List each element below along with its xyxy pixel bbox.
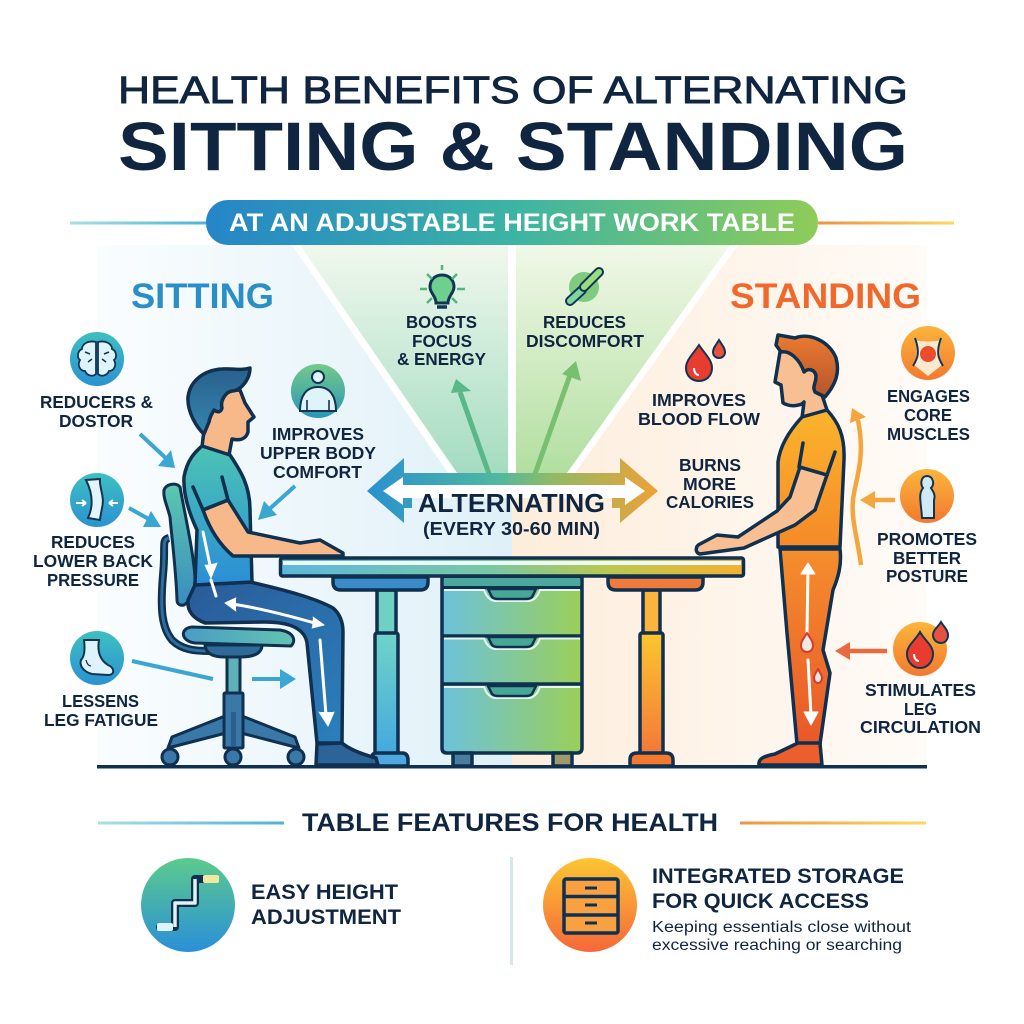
label: stimulates leg circulation: STIMULATES — [865, 680, 976, 700]
label: burns more calories: CALORIES — [666, 492, 754, 512]
label: integrated storage: Keeping essentials close without — [652, 919, 912, 936]
panel: center left green wedge — [300, 245, 508, 473]
label: engages core muscles: CORE — [904, 405, 952, 425]
label: alternating: (EVERY 30-60 MIN) — [423, 518, 600, 539]
standing person — [696, 335, 844, 765]
label: boosts focus and energy: & ENERGY — [397, 349, 486, 369]
label: lessens leg fatigue: LESSENS — [62, 691, 139, 711]
hair — [188, 368, 250, 434]
shoe — [316, 743, 378, 765]
icon: blood drops — [686, 340, 725, 381]
icon: height adjust crank — [141, 858, 235, 952]
subtitle banner: AT AN ADJUSTABLE HEIGHT WORK TABLE — [229, 209, 795, 237]
label: engages core muscles: ENGAGES — [887, 386, 970, 406]
face — [775, 345, 835, 418]
bracket right — [608, 577, 703, 590]
icon: brain — [70, 332, 124, 386]
table leg left — [372, 590, 408, 766]
floor line — [97, 765, 927, 768]
label: boosts focus and energy — [397, 312, 486, 369]
label: lessens leg fatigue — [44, 691, 158, 730]
title: HEALTH BENEFITS OF ALTERNATING — [118, 70, 908, 112]
arm — [203, 500, 343, 556]
table leg right — [630, 590, 673, 766]
label: integrated storage: excessive reaching or searching — [652, 937, 902, 954]
title — [118, 70, 908, 185]
label: promotes better posture: BETTER — [893, 548, 961, 568]
divider — [510, 857, 513, 965]
label: improves blood flow: BLOOD FLOW — [638, 409, 760, 429]
sitting chair — [162, 484, 304, 765]
icon: lower back — [70, 473, 124, 527]
label: improves blood flow — [638, 390, 760, 429]
sleeve lines — [193, 477, 228, 510]
label: burns more calories: MORE — [683, 474, 736, 494]
label: improves upper body comfort: COMFORT — [273, 462, 362, 482]
icon: core muscles — [901, 326, 955, 380]
label: reduces discomfort: REDUCES — [543, 312, 626, 332]
neck and face — [202, 390, 254, 455]
blood drops on leg — [801, 633, 822, 683]
label: lessens leg fatigue: LEG FATIGUE — [44, 710, 158, 730]
label: reduces lower back pressure — [33, 532, 153, 590]
arrow: to upper back — [140, 434, 175, 468]
label: engages core muscles: MUSCLES — [887, 424, 970, 444]
label: reduces lower back pressure: LOWER BACK — [33, 551, 153, 571]
label: boosts focus and energy: BOOSTS — [406, 312, 477, 332]
arrow: to leg — [835, 642, 887, 660]
label: reduces discomfort — [526, 312, 644, 351]
panel: center right green wedge — [516, 245, 730, 473]
sleeve lines — [799, 443, 835, 475]
label: integrated storage: FOR QUICK ACCESS — [652, 890, 869, 913]
subtitle banner — [70, 200, 954, 245]
arrow: to upper body — [258, 486, 295, 520]
label: engages core muscles — [887, 386, 970, 444]
background panels — [97, 245, 927, 766]
heading: standing: STANDING — [730, 277, 921, 316]
shirt — [184, 446, 252, 585]
icon: double arrow alternating — [367, 458, 658, 523]
label: improves upper body comfort — [260, 424, 376, 482]
label: reduces lower back pressure: REDUCES — [51, 532, 135, 552]
icon: connected link — [569, 272, 599, 302]
label: reducers and dostor: DOSTOR — [59, 411, 133, 431]
sitting person — [184, 368, 378, 765]
icon: foot — [70, 631, 124, 685]
label: reducers and dostor: REDUCERS & — [40, 392, 153, 412]
title: SITTING & STANDING — [118, 108, 908, 185]
table top — [280, 558, 744, 576]
icon: storage cabinet — [543, 858, 637, 952]
label: improves upper body comfort: UPPER BODY — [260, 443, 376, 463]
label: integrated storage — [652, 865, 912, 954]
label: reduces discomfort: DISCOMFORT — [526, 331, 644, 351]
label: integrated storage: INTEGRATED STORAGE — [652, 865, 904, 888]
label: alternating: ALTERNATING — [418, 488, 605, 518]
label: easy height adjustment — [251, 881, 401, 929]
bracket left — [333, 577, 428, 590]
drawer cabinet — [442, 577, 582, 766]
icon: leg circulation — [893, 622, 948, 676]
label: burns more calories: BURNS — [679, 455, 741, 475]
hair — [776, 335, 838, 397]
shoe — [759, 743, 822, 765]
label: reducers and dostor — [40, 392, 153, 431]
label: promotes better posture — [877, 529, 977, 586]
white posture arrows — [203, 532, 334, 726]
arrow: posture curve — [850, 408, 866, 565]
label: stimulates leg circulation — [860, 680, 981, 737]
icon: lightbulb — [420, 265, 465, 307]
shirt — [778, 410, 844, 547]
work table — [280, 558, 744, 766]
label: stimulates leg circulation: LEG — [904, 699, 937, 719]
label: improves upper body comfort: IMPROVES — [272, 424, 364, 444]
label: stimulates leg circulation: CIRCULATION — [860, 717, 981, 737]
heading: sitting: SITTING — [131, 277, 274, 316]
white circulation arrows — [801, 563, 818, 725]
arrow: to focus — [451, 379, 489, 474]
line: leg fatigue connector — [132, 661, 213, 679]
label: promotes better posture: PROMOTES — [877, 529, 977, 549]
label: easy height adjustment: EASY HEIGHT — [251, 881, 398, 904]
arrow: to discomfort — [535, 361, 581, 474]
label: easy height adjustment: ADJUSTMENT — [251, 906, 401, 929]
heading: table features: TABLE FEATURES FOR HEALTH — [302, 809, 718, 837]
label: reduces lower back pressure: PRESSURE — [47, 570, 139, 590]
label: promotes better posture: POSTURE — [886, 566, 968, 586]
pants — [780, 549, 841, 744]
arrow: to lower back — [129, 508, 161, 527]
label: alternating — [418, 488, 605, 539]
label: improves blood flow: IMPROVES — [652, 390, 746, 410]
pants — [188, 582, 343, 743]
icon: posture — [900, 469, 954, 523]
arrow: to posture — [860, 491, 895, 509]
label: boosts focus and energy: FOCUS — [412, 331, 472, 351]
heading: table features — [98, 809, 926, 837]
label: burns more calories — [666, 455, 754, 512]
arrow: leg fatigue — [252, 669, 296, 689]
arm — [696, 467, 827, 554]
icon: upper body — [291, 364, 345, 418]
